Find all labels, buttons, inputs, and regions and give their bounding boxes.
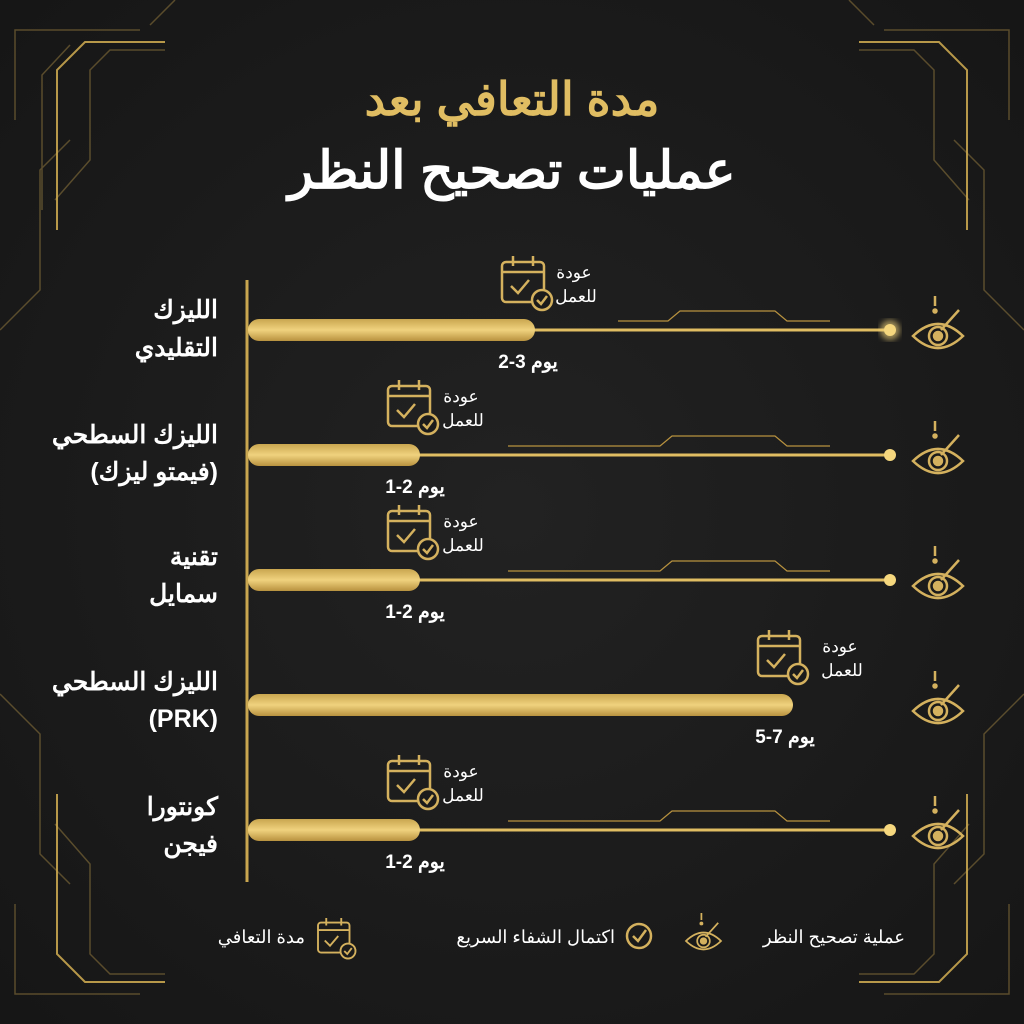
row 1: الليزك [153,296,218,325]
row 4: للعمل [821,661,863,680]
row 3: عودة [443,512,479,532]
row 2: عودة [443,387,479,407]
row 3: للعمل [442,536,484,555]
row 2: الليزك السطحي [52,421,218,450]
row 5: 1-2 يوم [385,852,445,873]
row 1: التقليدي [135,334,218,363]
row 4 [52,630,963,748]
legend [218,913,905,958]
legend: عملية تصحيح النظر [762,927,905,948]
row 1: عودة [556,263,592,283]
row 2: (فيمتو ليزك) [90,458,218,487]
title: عمليات تصحيح النظر [285,142,736,202]
row 1: 2-3 يوم [498,352,558,373]
row 5: فيجن [163,830,218,859]
legend: مدة التعافي [218,927,305,947]
row 4: عودة [822,637,858,657]
legend: اكتمال الشفاء السريع [456,927,615,948]
row 5: للعمل [442,786,484,805]
title: مدة التعافي بعد [365,73,659,127]
row 4: 5-7 يوم [755,727,815,748]
row 5 [147,755,963,873]
row 3: 1-2 يوم [385,602,445,623]
row 2: 1-2 يوم [385,477,445,498]
row 3: تقنية [170,543,218,571]
title [285,73,736,202]
row 2 [52,380,963,498]
axis [246,280,248,882]
row 4: (PRK) [149,705,218,733]
row 3: سمايل [149,580,218,608]
row 5: كونتورا [147,793,219,822]
row 1: للعمل [555,287,597,306]
row 2: للعمل [442,411,484,430]
row 5: عودة [443,762,479,782]
row 4: الليزك السطحي [52,668,218,697]
row 3 [149,505,963,623]
row 1 [135,256,963,373]
